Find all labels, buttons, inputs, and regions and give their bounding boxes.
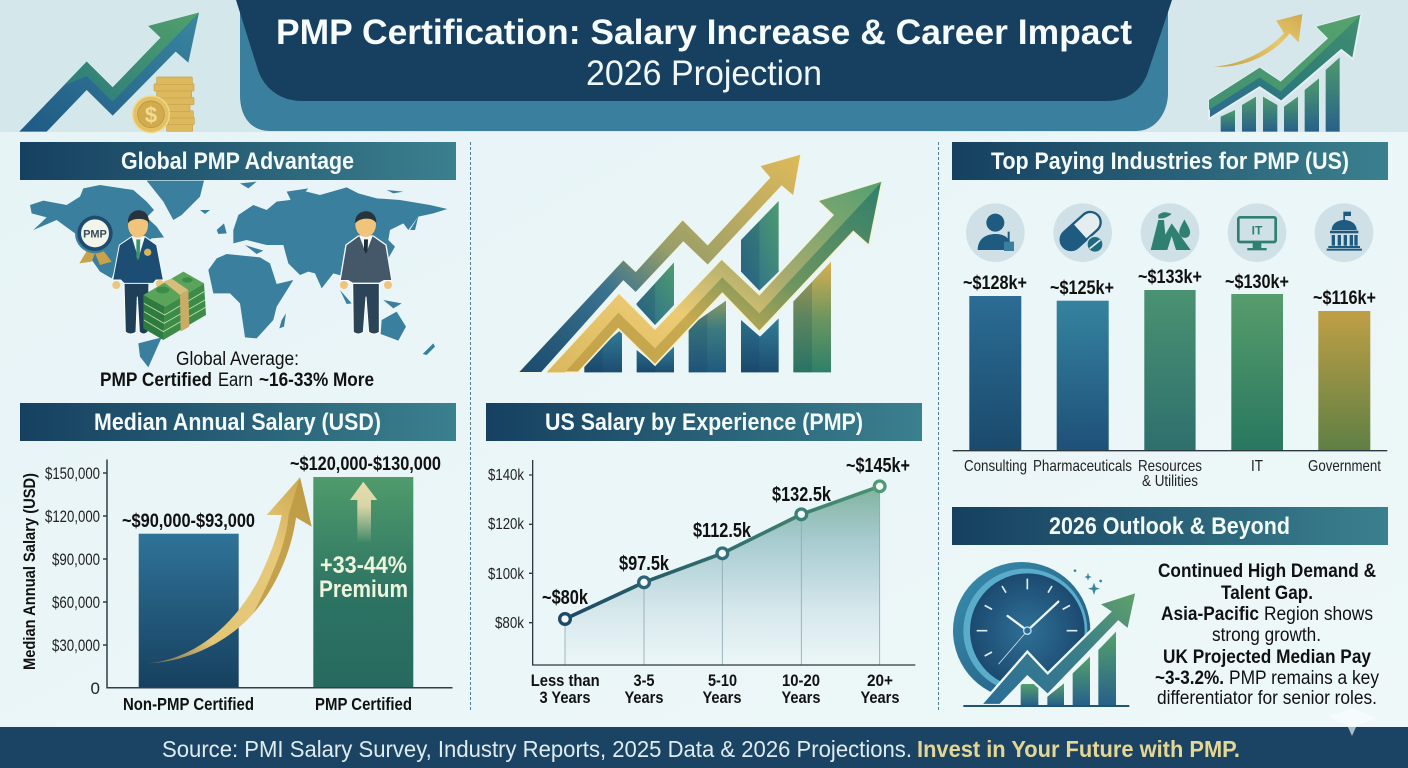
icon: clock with rising arrow <box>953 562 1137 707</box>
panel: global PMP advantage <box>20 142 456 391</box>
text block: outlook <box>1155 561 1379 709</box>
figure: certified professional <box>112 210 164 334</box>
y axis labels <box>45 464 100 698</box>
arrow: premium up <box>350 482 377 543</box>
icon: bar chart with arrows <box>1209 14 1361 132</box>
icon: rising arrow with coins: $ <box>145 102 157 127</box>
category labels: Consulting <box>964 458 1027 475</box>
category labels: Resources <box>1138 458 1202 475</box>
icon: stack of banknotes <box>143 272 206 340</box>
value labels: ~$116k+ <box>1313 287 1376 309</box>
caption: global average: PMP Certified <box>100 370 212 391</box>
heading: US salary by experience <box>486 403 922 441</box>
call to action: Invest in Your Future with PMP. <box>917 736 1240 762</box>
caption: global average: Global Average: <box>176 349 299 370</box>
y axis labels <box>488 467 524 632</box>
y axis labels: $100k <box>488 566 524 583</box>
category labels: Government <box>1308 458 1381 475</box>
text block: outlook: strong growth. <box>1212 625 1321 646</box>
y axis title: Median Annual Salary (USD) <box>20 473 39 670</box>
x axis labels: 5-10 <box>708 671 737 690</box>
world map <box>30 181 447 367</box>
x axis labels: Years <box>782 688 820 707</box>
value labels: ~$130k+ <box>1225 271 1289 293</box>
x axis labels: Years <box>624 688 664 707</box>
caption: global average: ~16-33% More <box>259 370 374 391</box>
y axis labels: $120,000 <box>45 507 100 526</box>
bar chart: industries <box>953 266 1387 490</box>
value labels: $112.5k <box>693 520 752 542</box>
y axis labels: $120k <box>488 516 524 533</box>
value labels: $132.5k <box>772 484 832 506</box>
category labels: IT <box>1251 458 1263 475</box>
value labels: ~$145k+ <box>846 455 910 477</box>
category labels: & Utilities <box>1142 473 1198 490</box>
category labels: Pharmaceuticals <box>1033 458 1132 475</box>
text block: outlook: Talent Gap. <box>1221 583 1313 604</box>
text block: outlook: ~3-3.2%. <box>1155 668 1224 689</box>
icon: IT monitor <box>1238 217 1276 250</box>
panel: top paying industries <box>952 142 1388 490</box>
icon: government building <box>1327 212 1362 251</box>
heading: top paying industries <box>952 142 1388 180</box>
category labels <box>964 458 1381 490</box>
icons row <box>966 203 1373 262</box>
y axis labels: $90,000 <box>52 550 100 569</box>
value labels: ~$90,000-$93,000 <box>122 510 255 532</box>
x axis labels <box>123 694 412 714</box>
heading: global PMP advantage <box>20 142 456 180</box>
panel: US salary by experience <box>486 403 922 707</box>
icon: PMP badge <box>75 213 115 265</box>
value labels: $97.5k <box>619 553 670 575</box>
x axis labels: Years <box>702 688 742 707</box>
y axis labels: $150,000 <box>45 464 100 483</box>
x axis labels: 10-20 <box>782 671 820 690</box>
value labels: ~$128k+ <box>963 272 1027 294</box>
source text: Source: PMI Salary Survey, Industry Reports, 2025 Data & 2026 Projections. <box>162 736 912 762</box>
x axis labels: Less than <box>531 671 600 690</box>
x axis labels: 3-5 <box>634 671 654 690</box>
y axis labels: $80k <box>495 615 524 632</box>
caption: global average: Earn <box>218 370 253 391</box>
value labels: ~$80k <box>542 587 589 609</box>
figure: non-certified professional <box>340 211 392 334</box>
bar: non-PMP <box>139 534 239 688</box>
heading: median annual salary: Median Annual Salary (USD) <box>94 409 381 436</box>
dashed dividers <box>470 142 938 712</box>
line chart: salary by experience <box>488 455 915 707</box>
caption: global average <box>100 349 374 391</box>
heading: US salary by experience: US Salary by Experience (PMP) <box>545 409 863 436</box>
footer <box>0 708 1408 768</box>
callout: premium percentage <box>319 552 408 603</box>
bar: PMP <box>313 477 413 688</box>
bar chart: median salary <box>20 453 452 714</box>
panel: 2026 outlook <box>952 507 1388 709</box>
text block: outlook: differentiator for senior roles. <box>1157 688 1377 709</box>
icon: resources and utilities <box>1151 212 1191 250</box>
y axis labels: $30,000 <box>52 636 100 655</box>
text block: outlook: Region shows <box>1264 604 1373 625</box>
x axis labels: 3 Years <box>540 688 590 707</box>
text block: outlook: PMP remains a key <box>1229 668 1379 689</box>
callout: premium percentage: Premium <box>319 576 408 603</box>
x axis labels: Years <box>860 688 900 707</box>
value labels: ~$133k+ <box>1138 266 1202 288</box>
heading: 2026 outlook: 2026 Outlook & Beyond <box>1049 513 1290 540</box>
heading: median annual salary <box>20 403 456 441</box>
x axis labels: 20+ <box>867 671 893 690</box>
callout: premium percentage: +33-44% <box>320 552 407 579</box>
text block: outlook: Continued High Demand & <box>1158 561 1376 582</box>
x axis labels: Non-PMP Certified <box>123 694 254 714</box>
illustration: central growth chart <box>519 154 882 372</box>
y axis labels: $140k <box>488 467 524 484</box>
heading: top paying industries: Top Paying Industries for PMP (US) <box>991 148 1349 175</box>
icon: IT monitor: IT <box>1252 224 1263 238</box>
text block: outlook: Asia-Pacific <box>1161 604 1259 625</box>
y axis labels: $60,000 <box>52 593 100 612</box>
icon: PMP badge: PMP <box>83 228 107 240</box>
subtitle text: 2026 Projection <box>586 54 822 93</box>
y axis labels: 0 <box>91 679 100 698</box>
arrow: gold growth curve <box>148 477 312 663</box>
title banner <box>236 0 1172 131</box>
value labels <box>542 455 910 609</box>
value labels <box>963 266 1376 309</box>
text block: outlook: UK Projected Median Pay <box>1163 647 1371 668</box>
icon: consulting <box>978 214 1014 251</box>
icon: rising arrow with coins <box>19 13 199 133</box>
heading: 2026 outlook <box>952 507 1388 545</box>
value labels <box>122 453 441 532</box>
heading: global PMP advantage: Global PMP Advantage <box>121 148 354 175</box>
icon: pills <box>1056 208 1105 254</box>
value labels: ~$120,000-$130,000 <box>290 453 441 475</box>
value labels: ~$125k+ <box>1050 277 1114 299</box>
title text: PMP Certification: Salary Increase & Career Impact <box>276 13 1132 52</box>
x axis labels <box>531 671 900 707</box>
x axis labels: PMP Certified <box>315 694 412 714</box>
panel: median annual salary <box>20 403 456 714</box>
